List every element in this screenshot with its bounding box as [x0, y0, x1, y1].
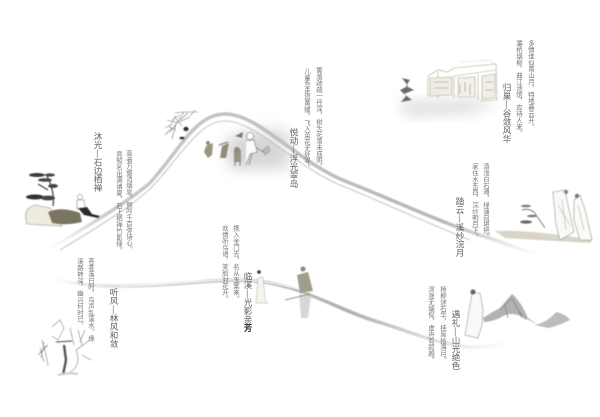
poem: 临溪: 携入金门去，名从玉案来。 [232, 225, 239, 302]
upper mountain curve [50, 114, 540, 254]
illustration: standing figure and seated figure with reflection [256, 266, 313, 318]
lower river curve [55, 278, 512, 347]
poem: 归巢 second line: 灞桥烟柳，曲江池馆，应待人来。 [515, 40, 522, 136]
poem: 听风 second line: 溪路转深，幽兴何时已。 [76, 258, 83, 328]
poem: 遇礼 second line: 溟涨无端倪，虚舟有超越。 [427, 286, 434, 363]
poem: 踏云 second line: 家住水东西，浣纱明月下。 [471, 163, 478, 240]
heading: 听风: 听风—林风和敛 [109, 288, 119, 348]
heading: 遇礼: 遇礼—山光绝色 [451, 310, 461, 370]
heading: 沐光: 沐光—石边栖禅 [93, 132, 103, 192]
illustration: children chasing a butterfly [204, 132, 270, 166]
poem: 遇礼: 杨柳迷石华，挂席拾海月。 [439, 286, 446, 363]
mist behind children [225, 130, 290, 170]
heading: 归巢: 归巢—谷敛风华 [502, 83, 512, 143]
mist below house [400, 100, 498, 116]
heading: 临溪: 临溪—光影亲 芳 [243, 272, 253, 332]
illustration: dark branch beside house [400, 78, 414, 102]
poem: 悦动 second line: 儿童急走追黄蝶，飞入菜花无处寻。 [303, 68, 310, 170]
illustration: branching tree [165, 110, 198, 139]
heading: 悦动: 悦动—浮光翠岛 [289, 128, 299, 188]
poem: 归巢: 多情谁似南山月，特地暮云开。 [527, 40, 534, 130]
poem: 沐光: 高者万壑消烟息，侧吟千首弥诗心。 [125, 150, 132, 252]
poem: 沐光 second line: 竟知名出满诸夏，石上栖禅竹影绿。 [115, 151, 122, 253]
poem: 悦动: 篱落疏疏一径深，树头花落未成阴。 [315, 67, 322, 169]
poem: 临溪 second line: 欢情听鸟语，笑脸对花开。 [221, 225, 228, 302]
illustration: pine, rocks and monk [26, 173, 100, 226]
illustration: pavilion house [428, 60, 497, 101]
heading: 踏云: 踏云—溪纱浣月 [455, 197, 465, 257]
illustration: gnarled tree with figure [38, 320, 91, 375]
poem: 听风: 苍苍落日时，鸟声乱溪水。缘 [87, 258, 94, 341]
illustration: woman in robes and mountains [465, 289, 570, 338]
poem: 踏云: 清浅白石滩，绿蒲向堪把。 [482, 163, 489, 240]
illustration: two scholars and pine on riverbank [495, 190, 592, 243]
